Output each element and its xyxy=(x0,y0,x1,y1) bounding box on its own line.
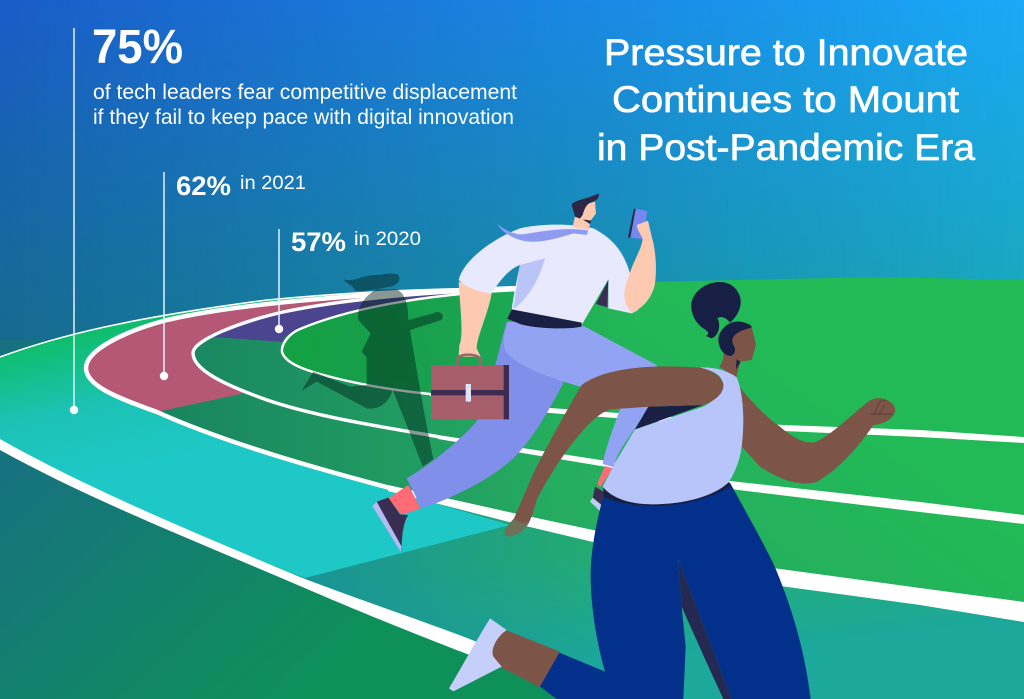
vertical marker 62 percent xyxy=(160,172,168,380)
woman back shoe xyxy=(590,466,613,512)
stat 62 percent in 2021: in 2021 xyxy=(240,173,306,194)
stat description: of tech leaders fear competitive displacement xyxy=(93,81,517,104)
white lane lines xyxy=(0,288,1024,699)
indigo lane for 57 percent xyxy=(213,289,520,342)
vertical marker 57 percent xyxy=(275,229,283,333)
stat description: if they fail to keep pace with digital innovation xyxy=(93,106,514,129)
man head xyxy=(572,193,599,230)
man shirt xyxy=(459,225,638,325)
woman top xyxy=(603,367,743,504)
title: Pressure to Innovate xyxy=(604,32,968,73)
woman hair xyxy=(691,282,752,356)
lane between the outer lines xyxy=(157,412,1024,699)
woman hand lines xyxy=(870,400,893,415)
stat description xyxy=(93,81,517,129)
rose lane for 62 percent xyxy=(86,288,520,412)
track field xyxy=(0,277,1024,699)
stat 57 percent in 2020: 57% xyxy=(291,227,346,257)
woman right arm xyxy=(737,383,895,483)
ground below track xyxy=(0,340,1024,699)
man tie xyxy=(497,224,588,242)
woman left arm xyxy=(505,366,723,536)
outer teal lane xyxy=(0,288,520,578)
man arm left xyxy=(459,282,492,357)
stat 57 percent in 2020 xyxy=(291,227,421,257)
vertical marker 75 percent xyxy=(70,28,78,414)
woman rear leg skin xyxy=(492,628,560,687)
inner infield shading xyxy=(282,285,640,422)
title: in Post-Pandemic Era xyxy=(597,127,975,168)
shadow runner silhouette xyxy=(302,274,443,467)
middle lanes shading xyxy=(86,284,640,546)
man shirt shade xyxy=(513,258,545,309)
man running with briefcase xyxy=(372,193,660,552)
man front leg xyxy=(504,322,660,467)
stat 62 percent in 2021: 62% xyxy=(176,171,231,201)
briefcase xyxy=(431,355,509,419)
man back leg xyxy=(407,322,580,508)
woman runner xyxy=(449,282,895,699)
woman neck and head xyxy=(719,327,756,378)
man shoes and socks xyxy=(372,485,421,552)
woman pants xyxy=(540,483,811,699)
man belt xyxy=(507,309,582,328)
stat 62 percent in 2021 xyxy=(176,171,306,201)
woman top inner shade xyxy=(635,405,703,429)
title xyxy=(597,32,975,168)
man arm with phone xyxy=(624,208,656,313)
stat 75 percent xyxy=(92,21,517,129)
woman belt xyxy=(603,481,731,506)
stat 75 percent: 75% xyxy=(92,21,183,74)
running track xyxy=(0,277,1024,699)
woman white shoe xyxy=(449,618,507,691)
background sky xyxy=(0,0,1024,360)
title: Continues to Mount xyxy=(612,79,960,120)
stat 57 percent in 2020: in 2020 xyxy=(354,229,421,250)
